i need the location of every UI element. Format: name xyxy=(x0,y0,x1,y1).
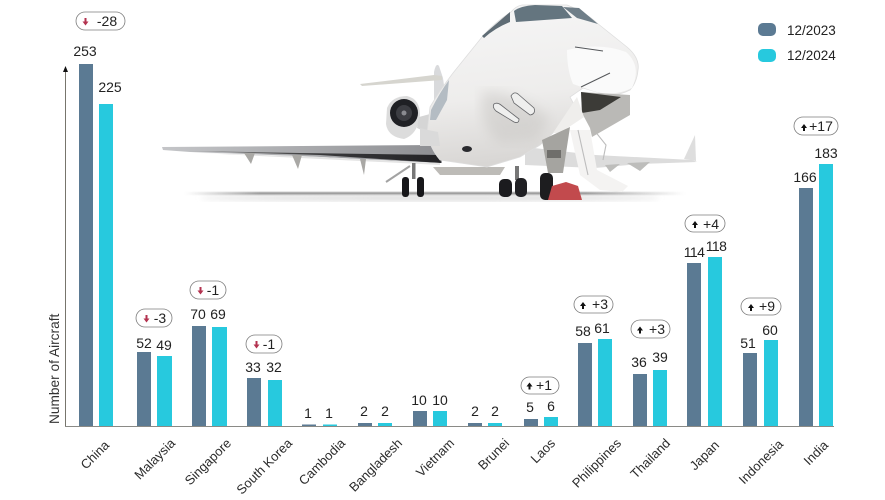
group: Cambodia xyxy=(296,405,349,488)
group: Japan: 118 xyxy=(706,238,727,254)
group: Philippines: 61 xyxy=(594,320,610,336)
group: India xyxy=(793,145,838,468)
y axis xyxy=(63,66,834,426)
change badge: Thailand: +3 xyxy=(649,321,665,337)
change badge: China: -28 xyxy=(97,13,117,29)
group: China: 225 xyxy=(98,79,122,95)
group: India: India xyxy=(801,437,832,468)
group: Brunei: Brunei xyxy=(475,435,512,473)
change badge: Malaysia: -3 xyxy=(154,310,166,326)
group: Japan xyxy=(684,238,727,473)
group: South Korea: 33 xyxy=(245,359,261,375)
group: Malaysia: 52 xyxy=(136,335,152,351)
group: China: China xyxy=(77,437,113,472)
group: Brunei xyxy=(468,403,512,473)
group: Thailand xyxy=(627,349,673,481)
group: Laos: 5 xyxy=(526,399,534,415)
group: Cambodia: 1 xyxy=(304,405,312,421)
group: Singapore: Singapore xyxy=(182,436,234,488)
group: Brunei: 2 xyxy=(491,403,499,419)
group: China xyxy=(73,43,122,472)
group: Thailand: 39 xyxy=(652,349,668,365)
group: Japan: Japan xyxy=(686,438,722,473)
change badge: India: +17 xyxy=(809,118,833,134)
group: India: 166 xyxy=(793,169,817,185)
change badge: Indonesia xyxy=(741,298,781,315)
main landing gear xyxy=(386,163,527,197)
group: Bangladesh xyxy=(346,403,405,495)
cockpit windows xyxy=(482,5,598,38)
group: South Korea: South Korea xyxy=(233,435,296,497)
group: Indonesia: 60 xyxy=(762,322,778,338)
change badge: Laos: +1 xyxy=(536,377,552,393)
change badge: South Korea xyxy=(246,335,282,353)
nose landing gear xyxy=(540,127,582,200)
change badge: South Korea: -1 xyxy=(263,336,275,352)
change badge: Thailand xyxy=(631,320,670,338)
change badge: Japan xyxy=(685,215,725,232)
group: Vietnam: 10 xyxy=(411,392,427,408)
group: Malaysia xyxy=(131,335,179,482)
group: Singapore: 70 xyxy=(190,306,206,322)
group: Bangladesh: 2 xyxy=(381,403,389,419)
group: Philippines xyxy=(569,320,624,491)
legend xyxy=(758,23,836,63)
group: Laos: 6 xyxy=(547,398,555,414)
group: Bangladesh: Bangladesh xyxy=(346,436,405,495)
change badge: China xyxy=(76,12,125,30)
group: Thailand: 36 xyxy=(631,354,647,370)
group: South Korea: 32 xyxy=(266,359,282,375)
change badge: India xyxy=(794,117,838,135)
change badge: Malaysia xyxy=(136,309,172,327)
change badge: Singapore xyxy=(190,281,226,299)
legend: 12/2024 xyxy=(787,48,836,63)
group: Cambodia: Cambodia xyxy=(296,435,349,488)
group: South Korea xyxy=(233,359,296,497)
group: Indonesia xyxy=(736,322,787,487)
group: India: 183 xyxy=(814,145,838,161)
right wing xyxy=(525,147,697,168)
group: Philippines: 58 xyxy=(575,323,591,339)
group: Vietnam: 10 xyxy=(432,392,448,408)
radome nose xyxy=(567,46,636,94)
fuselage xyxy=(427,5,638,167)
group: Vietnam: Vietnam xyxy=(413,436,457,480)
open door and stairs xyxy=(553,92,630,192)
change badge: Philippines: +3 xyxy=(592,296,608,312)
group: Cambodia: 1 xyxy=(325,405,333,421)
group: Malaysia: 49 xyxy=(156,337,172,353)
group: Malaysia: Malaysia xyxy=(131,435,179,482)
group: Vietnam xyxy=(411,392,457,480)
left wing xyxy=(162,145,442,163)
change badge: Philippines xyxy=(574,296,613,313)
group: China: 253 xyxy=(73,43,97,59)
group: Thailand: Thailand xyxy=(627,436,673,481)
group: Indonesia: Indonesia xyxy=(736,436,787,487)
change badge: Indonesia: +9 xyxy=(759,298,775,314)
group: Indonesia: 51 xyxy=(740,335,756,351)
group: Laos xyxy=(524,398,558,466)
change badge: Japan: +4 xyxy=(703,216,719,232)
y axis title: Number of Aircraft xyxy=(47,314,62,424)
legend: 12/2023 xyxy=(787,23,836,38)
group: Bangladesh: 2 xyxy=(360,403,368,419)
change badge: Singapore: -1 xyxy=(207,282,219,298)
change badge: Laos xyxy=(521,377,559,394)
group: Laos: Laos xyxy=(528,435,558,466)
group: Japan: 114 xyxy=(684,244,705,260)
group: Philippines: Philippines xyxy=(569,435,624,491)
airplane photo illustration xyxy=(162,5,697,201)
group: Singapore xyxy=(182,306,234,488)
group: Brunei: 2 xyxy=(471,403,479,419)
group: Singapore: 69 xyxy=(210,306,226,322)
jet engine xyxy=(386,96,430,139)
